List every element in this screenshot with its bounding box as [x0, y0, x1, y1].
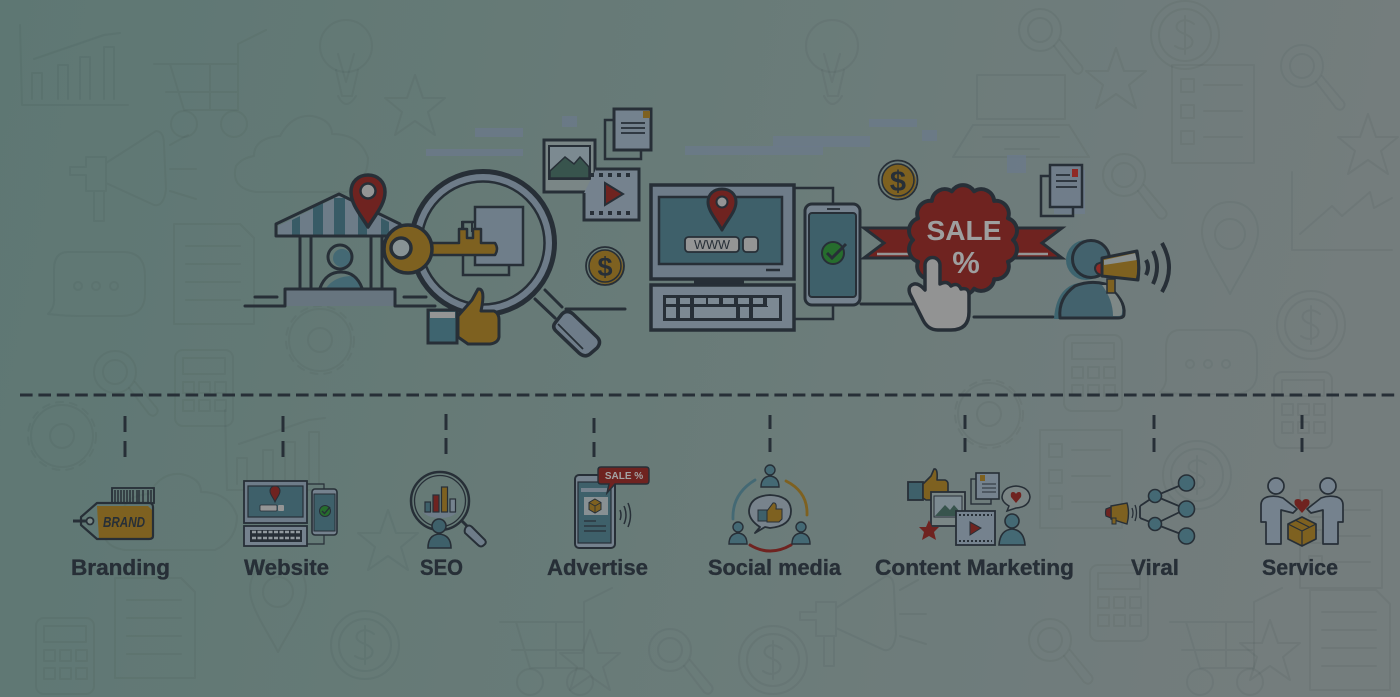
label: Content Marketing: Content Marketing	[875, 555, 1074, 580]
icon: brand tag: BRAND	[103, 514, 145, 531]
column: Content Marketing	[875, 415, 1074, 580]
connector dash	[444, 414, 448, 454]
column: Advertise	[547, 418, 649, 580]
column: Viral	[1106, 415, 1194, 580]
illustration: image, video, document cluster	[544, 109, 651, 220]
icon: dollar coin: $	[597, 252, 613, 282]
illustration: branch building	[245, 175, 435, 306]
sound waves	[1146, 243, 1169, 292]
illustration: person with megaphone	[1054, 240, 1169, 319]
column: Service	[1261, 415, 1343, 580]
dashed divider	[20, 394, 1400, 396]
icon: second dollar coin: $	[890, 166, 906, 198]
icon: brand tag	[73, 488, 154, 539]
connector dash	[282, 416, 284, 457]
pointing hand	[909, 258, 969, 330]
url bar	[685, 237, 758, 252]
illustration: magnifying glass	[412, 172, 625, 356]
icon: dollar coin	[586, 247, 624, 285]
url bar: WWW	[694, 238, 730, 252]
column: Branding	[71, 416, 170, 580]
map pin on screen	[708, 189, 736, 230]
decorative pale bars	[426, 116, 1026, 173]
connector dash	[592, 418, 596, 457]
illustration: thumbs up	[428, 289, 499, 344]
label: Service: Service	[1262, 555, 1338, 580]
illustration: documents with red tag	[1041, 165, 1085, 216]
column: SEO	[411, 414, 486, 580]
illustration: desktop computer	[651, 185, 833, 330]
icon: computer and phone	[244, 481, 337, 546]
illustration: sale ribbon and badge	[864, 185, 1062, 330]
map pin on roof	[351, 175, 385, 227]
keyboard	[651, 285, 794, 330]
sale text: SALE	[926, 215, 1002, 246]
label: Advertise: Advertise	[547, 555, 648, 580]
connector dash	[964, 415, 966, 452]
percent sign: %	[952, 245, 980, 280]
icon: phone advert	[575, 467, 649, 548]
label: SEO: SEO	[420, 555, 463, 580]
icon: content cluster	[908, 469, 1030, 545]
column: Social media	[708, 415, 842, 580]
person in building	[320, 245, 362, 288]
label: Branding: Branding	[71, 555, 170, 580]
icon: service handover	[1261, 478, 1343, 546]
illustration: golden key	[384, 222, 497, 273]
label: Viral: Viral	[1131, 555, 1179, 580]
connector dash	[768, 415, 772, 452]
label: Social media: Social media	[708, 555, 842, 580]
icon: viral network	[1106, 475, 1194, 544]
connector dash	[1300, 415, 1304, 452]
illustration: smartphone with check mark	[805, 204, 860, 305]
main illustration	[245, 109, 1169, 356]
connector dash	[1152, 415, 1156, 452]
icon: analytics magnifier with person	[411, 472, 486, 548]
column: Website	[244, 416, 337, 580]
icon: social circle	[729, 465, 810, 551]
icon: second dollar coin	[878, 160, 918, 200]
icon: phone advert: SALE %	[605, 471, 643, 482]
label: Website: Website	[244, 555, 329, 580]
connector dash	[124, 416, 126, 457]
